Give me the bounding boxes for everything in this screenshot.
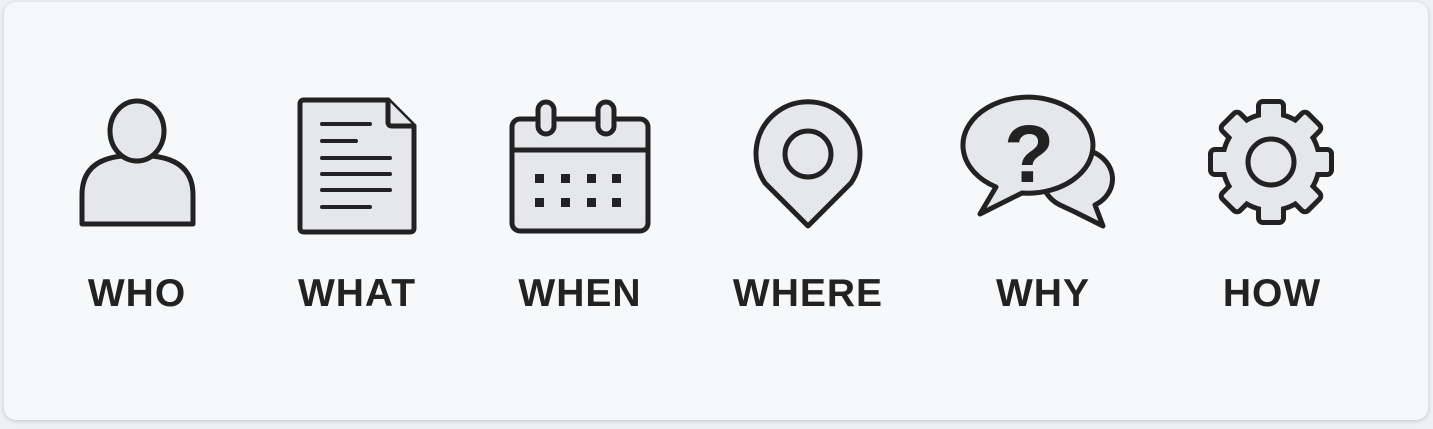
label: HOW: HOW — [1223, 272, 1321, 315]
label: WHERE: WHERE — [733, 272, 883, 315]
icon: calendar — [512, 102, 648, 231]
label: WHAT: WHAT — [298, 272, 416, 315]
icon: gear — [1213, 104, 1329, 220]
icon: person — [82, 101, 193, 224]
label: WHY: WHY — [996, 272, 1090, 315]
icon: document — [300, 100, 414, 232]
icon: map pin — [756, 102, 860, 226]
icon: speech bubbles: ? — [1004, 109, 1054, 200]
label: WHO: WHO — [88, 272, 186, 315]
icon: speech bubbles — [963, 97, 1112, 226]
label: WHEN: WHEN — [518, 272, 642, 315]
